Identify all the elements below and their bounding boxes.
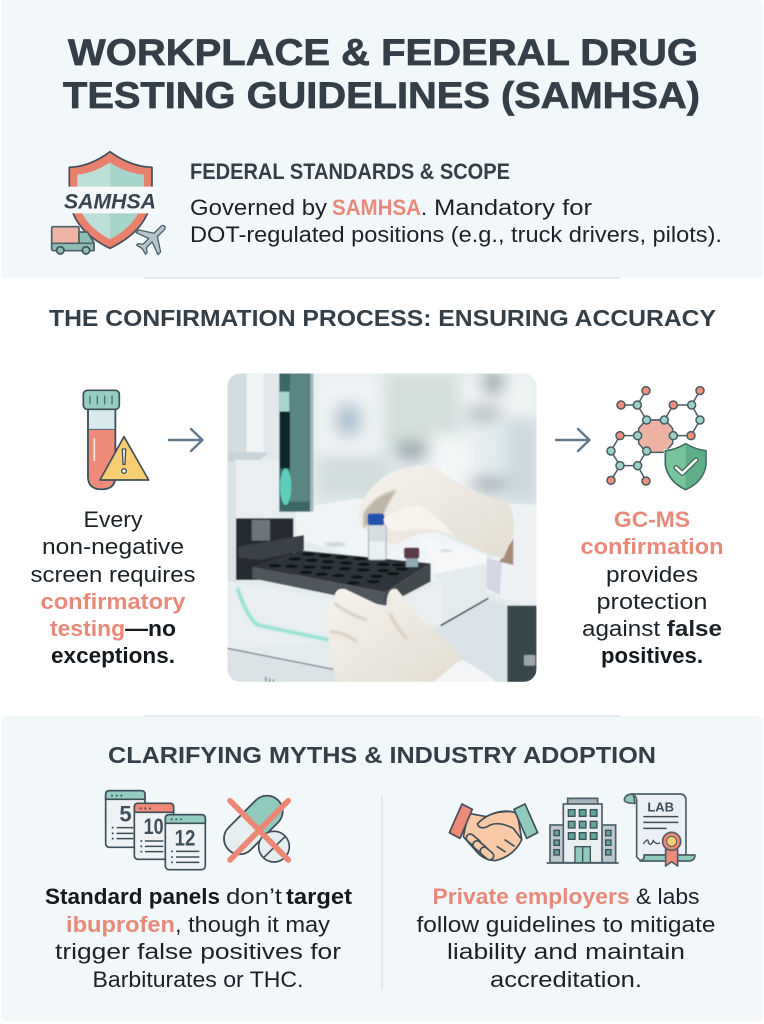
heading: myths and adoption: CLARIFYING MYTHS & INDUSTRY ADOPTION	[108, 742, 656, 768]
arrow: photo to molecule	[556, 429, 590, 451]
text: ibuprofen note: target	[286, 884, 353, 909]
text: right confirmation caption	[580, 507, 724, 668]
icon: panel calendars 5 10 12: 5	[119, 801, 132, 826]
icon: lab certificate	[624, 794, 695, 866]
text: ibuprofen note: don’t	[226, 884, 282, 909]
table	[296, 498, 487, 582]
text: ibuprofen note: ibuprofen , though it may	[66, 912, 330, 937]
text: right confirmation caption: provides	[606, 562, 698, 587]
upper hand back	[358, 466, 514, 558]
machine body	[227, 582, 442, 648]
icon: lab certificate: LAB	[647, 800, 674, 814]
text: federal standards body: Governed by	[190, 195, 327, 220]
tray	[252, 550, 431, 592]
text: right confirmation caption: against false	[582, 616, 722, 641]
text: left confirmation caption: exceptions.	[51, 643, 175, 668]
icon: office building	[547, 798, 619, 863]
text: left confirmation caption: Every	[84, 507, 142, 532]
text: right confirmation caption: positives.	[601, 643, 703, 668]
text: left confirmation caption: screen requires	[30, 562, 196, 587]
icon: molecule with green shield check	[607, 387, 706, 490]
text: federal standards body: DOT-regulated positions (e.g., truck drivers, pilots).	[190, 222, 722, 247]
text: federal standards body: SAMHSA	[332, 195, 421, 220]
icon: SAMHSA shield with truck and plane	[52, 152, 176, 261]
text: federal standards body	[190, 195, 722, 247]
text: left confirmation caption	[30, 507, 196, 668]
icon: panel calendars 5 10 12: 10	[144, 814, 164, 839]
photo: gloved hands loading vial tray	[227, 373, 537, 682]
icon: panel calendars 5 10 12: 12	[175, 825, 195, 850]
text: ibuprofen note: Barbiturates or THC.	[92, 967, 304, 992]
text: left confirmation caption: non-negative	[42, 534, 184, 559]
text: private employers note: accreditation.	[490, 967, 642, 992]
lower hand	[433, 660, 497, 682]
text: ibuprofen note: Standard panels	[45, 884, 220, 909]
title: TESTING GUIDELINES (SAMHSA)	[63, 75, 700, 116]
text: private employers note	[416, 884, 716, 992]
divider: bottom columns	[381, 796, 383, 990]
first vial	[368, 525, 386, 560]
instrument tower	[227, 373, 281, 518]
text: left confirmation caption: testing—no	[50, 616, 176, 641]
text: private employers note: follow guidelines to mitigate	[416, 912, 716, 937]
icon: handshake	[449, 804, 538, 862]
icon: crossed out pills	[217, 789, 289, 862]
text: private employers note: Private employers & labs	[432, 884, 700, 909]
text: ibuprofen note: trigger false positives for	[55, 939, 341, 964]
text: private employers note: liability and maintain	[447, 939, 685, 964]
title	[63, 32, 700, 116]
text: right confirmation caption: confirmation	[580, 534, 724, 559]
text: right confirmation caption: protection	[596, 589, 708, 614]
panel: bottom background	[1, 716, 763, 1021]
title: WORKPLACE & FEDERAL DRUG	[68, 32, 698, 73]
icon: panel calendars 5 10 12	[106, 791, 205, 870]
second vial	[406, 558, 418, 567]
text: right confirmation caption: GC-MS	[614, 507, 690, 532]
heading: federal standards: FEDERAL STANDARDS & SCOPE	[190, 159, 510, 184]
icon: SAMHSA shield with truck and plane: SAMHSA	[64, 188, 156, 213]
right panel	[507, 606, 537, 682]
text: ibuprofen note	[45, 884, 353, 992]
panel: header background	[1, 0, 763, 278]
icon: test tube with warning	[83, 390, 149, 489]
heading: confirmation process: THE CONFIRMATION PROCESS: ENSURING ACCURACY	[49, 305, 716, 331]
arrow: test tube to photo	[169, 429, 202, 451]
sleeve	[487, 503, 537, 608]
thumb	[383, 505, 453, 535]
text: left confirmation caption: confirmatory	[40, 589, 186, 614]
text: federal standards body: .	[421, 195, 427, 220]
text: federal standards body: Mandatory for	[434, 195, 592, 220]
